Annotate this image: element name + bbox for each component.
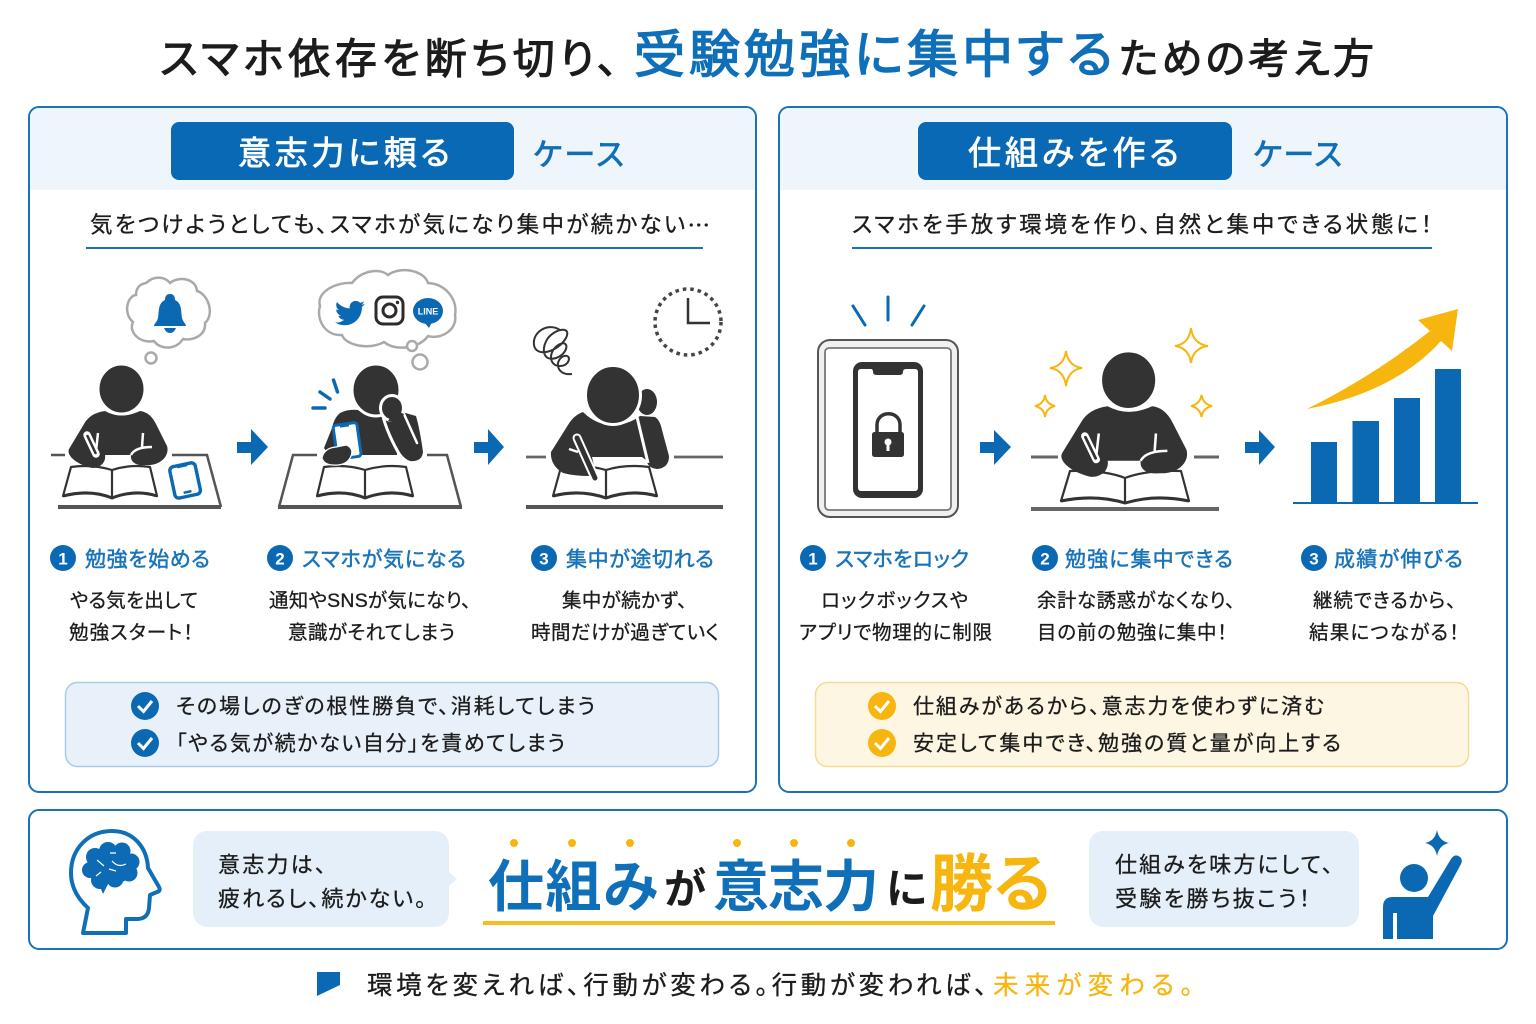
step 2 label and description: 目の前の勉強に集中！ — [1037, 622, 1227, 644]
footer text: 環境を変えれば、行動が変わる。行動が変われば、 — [367, 972, 987, 1000]
step 2 label and description: 2 — [275, 550, 285, 568]
icon: LINE chat: LINE — [418, 306, 438, 316]
icon: bell thought bubble — [127, 278, 210, 364]
arrow 1 — [237, 429, 268, 465]
arrow 2 — [1245, 430, 1275, 465]
footer message — [317, 972, 1193, 1000]
check text 2: 「やる気が続かない自分」を責めてしまう — [176, 732, 565, 756]
speech bubble: willpower: 疲れるし、続かない。 — [218, 886, 426, 912]
icon: padlock — [872, 414, 904, 457]
step 1 label and description: 1 — [58, 550, 68, 568]
step 3 label and description: 結果につながる！ — [1309, 622, 1459, 644]
message text — [488, 850, 1051, 920]
scene 1: locked phone — [818, 297, 958, 517]
step 3 label and description: 集中が途切れる — [566, 548, 714, 572]
heading: willpower case — [171, 122, 624, 180]
footer text: 未来が変わる。 — [993, 972, 1193, 1000]
pen — [577, 438, 595, 478]
subtitle: system case: スマホを手放す環境を作り、自然と集中できる状態に！ — [852, 212, 1432, 238]
person studying — [69, 364, 168, 468]
desk — [278, 455, 462, 509]
arrow 1 — [980, 430, 1011, 465]
title: 受験勉強に集中する — [634, 26, 1113, 84]
message text: 勝る — [930, 850, 1051, 920]
desk — [1031, 457, 1219, 511]
title — [160, 26, 1374, 84]
step 1 label and description: アプリで物理的に制限 — [799, 622, 992, 644]
message text: が — [664, 866, 706, 912]
step 2 label and description: 余計な誘惑がなくなり、 — [1037, 590, 1235, 612]
icon: bird — [335, 301, 365, 325]
rays — [853, 297, 924, 325]
step 2 label and description — [1032, 545, 1235, 644]
title: スマホ依存を断ち切り、 — [160, 36, 618, 82]
icon: check — [131, 692, 159, 720]
icon: head with brain — [71, 831, 160, 933]
person holding phone — [322, 364, 423, 465]
person head in hand — [551, 366, 669, 478]
heading: system case: 仕組みを作る — [968, 134, 1179, 172]
speech bubble: use the system: 仕組みを味方にして、 — [1115, 852, 1333, 878]
step 3 label and description: 3 — [539, 550, 549, 568]
lock box — [818, 340, 958, 517]
step 1 label and description: やる気を出して — [70, 590, 198, 612]
callout: system benefits — [816, 682, 1468, 766]
phone — [853, 362, 923, 498]
icon: dotted clock — [655, 289, 721, 355]
chart: rising grades — [1293, 309, 1478, 504]
step 2 label and description: 意識がそれてしまう — [288, 622, 455, 644]
message text: 意志力 — [713, 856, 879, 918]
icon: person raising arm — [1383, 830, 1462, 939]
step 2 label and description: 勉強に集中できる — [1065, 548, 1233, 572]
speech bubble: willpower — [193, 831, 457, 927]
heading: system case — [918, 122, 1342, 180]
scene 2: focused study — [1031, 328, 1219, 511]
scene 3: losing focus — [526, 289, 723, 509]
step 1 label and description: 勉強スタート！ — [69, 622, 193, 644]
step 1 label and description: 1 — [808, 550, 818, 568]
icon: smartphone — [169, 462, 201, 499]
open book — [317, 466, 413, 498]
step 2 label and description — [267, 545, 471, 644]
speech bubble: willpower: 意志力は、 — [218, 852, 326, 878]
message text: に — [886, 866, 927, 912]
desk — [51, 455, 221, 509]
icon: flag — [317, 972, 340, 996]
check text 1: 仕組みがあるから、意志力を使わずに済む — [913, 696, 1324, 718]
step 1 label and description — [50, 545, 210, 644]
step 2 label and description: スマホが気になる — [302, 548, 466, 572]
speech bubble: use the system: 受験を勝ち抜こう！ — [1115, 886, 1310, 912]
step 1 label and description — [799, 545, 992, 644]
step 3 label and description — [1301, 545, 1463, 644]
step 2 label and description: 通知やSNSが気になり、 — [269, 590, 471, 612]
heading: system case: ケース — [1253, 138, 1342, 172]
step 3 label and description: 継続できるから、 — [1313, 590, 1456, 612]
step 3 label and description: 3 — [1309, 550, 1319, 568]
step 3 label and description: 成績が伸びる — [1334, 548, 1463, 572]
open book — [1061, 471, 1189, 503]
panel: conclusion banner — [29, 810, 1507, 949]
icon: camera — [376, 297, 403, 324]
icon: check — [868, 692, 896, 720]
check text 2: 安定して集中でき、勉強の質と量が向上する — [913, 732, 1341, 756]
step 3 label and description: 集中が続かず、 — [562, 590, 687, 612]
notification marks — [313, 380, 338, 408]
panel: willpower case — [29, 107, 756, 792]
sparkles — [1035, 328, 1212, 417]
icon: check — [131, 729, 159, 757]
open book — [63, 466, 157, 498]
step 1 label and description: スマホをロック — [835, 548, 969, 572]
speech bubble: use the system — [1089, 831, 1359, 927]
step 2 label and description: 2 — [1040, 550, 1050, 568]
check text 1: その場しのぎの根性勝負で、消耗してしまう — [176, 696, 595, 718]
message text: 仕組み — [488, 856, 658, 918]
scene 2: phone distraction — [278, 270, 462, 509]
person studying — [1061, 351, 1187, 477]
panel: system case — [779, 107, 1507, 792]
callout: willpower downsides — [66, 682, 718, 766]
step 3 label and description: 時間だけが過ぎていく — [531, 622, 719, 644]
heading: willpower case: 意志力に頼る — [238, 134, 450, 172]
heading: willpower case: ケース — [533, 138, 624, 172]
subtitle: willpower case: 気をつけようとしても、スマホが気になり集中が続かない… — [90, 209, 710, 241]
icon: SNS thought bubble — [319, 270, 455, 370]
icon: check — [868, 729, 896, 757]
emphasis dots — [510, 839, 855, 847]
step 1 label and description: 勉強を始める — [85, 548, 210, 572]
main message — [483, 839, 1055, 925]
arrow: rising trend — [1307, 309, 1458, 409]
title: ための考え方 — [1119, 36, 1374, 82]
step 3 label and description — [531, 545, 719, 644]
underline — [483, 921, 1055, 925]
open book — [553, 466, 657, 498]
desk — [526, 457, 723, 509]
scene 1: starting to study — [51, 278, 221, 509]
icon: scribble — [534, 327, 572, 374]
step 1 label and description: ロックボックスや — [821, 590, 968, 612]
arrow 2 — [474, 429, 504, 465]
